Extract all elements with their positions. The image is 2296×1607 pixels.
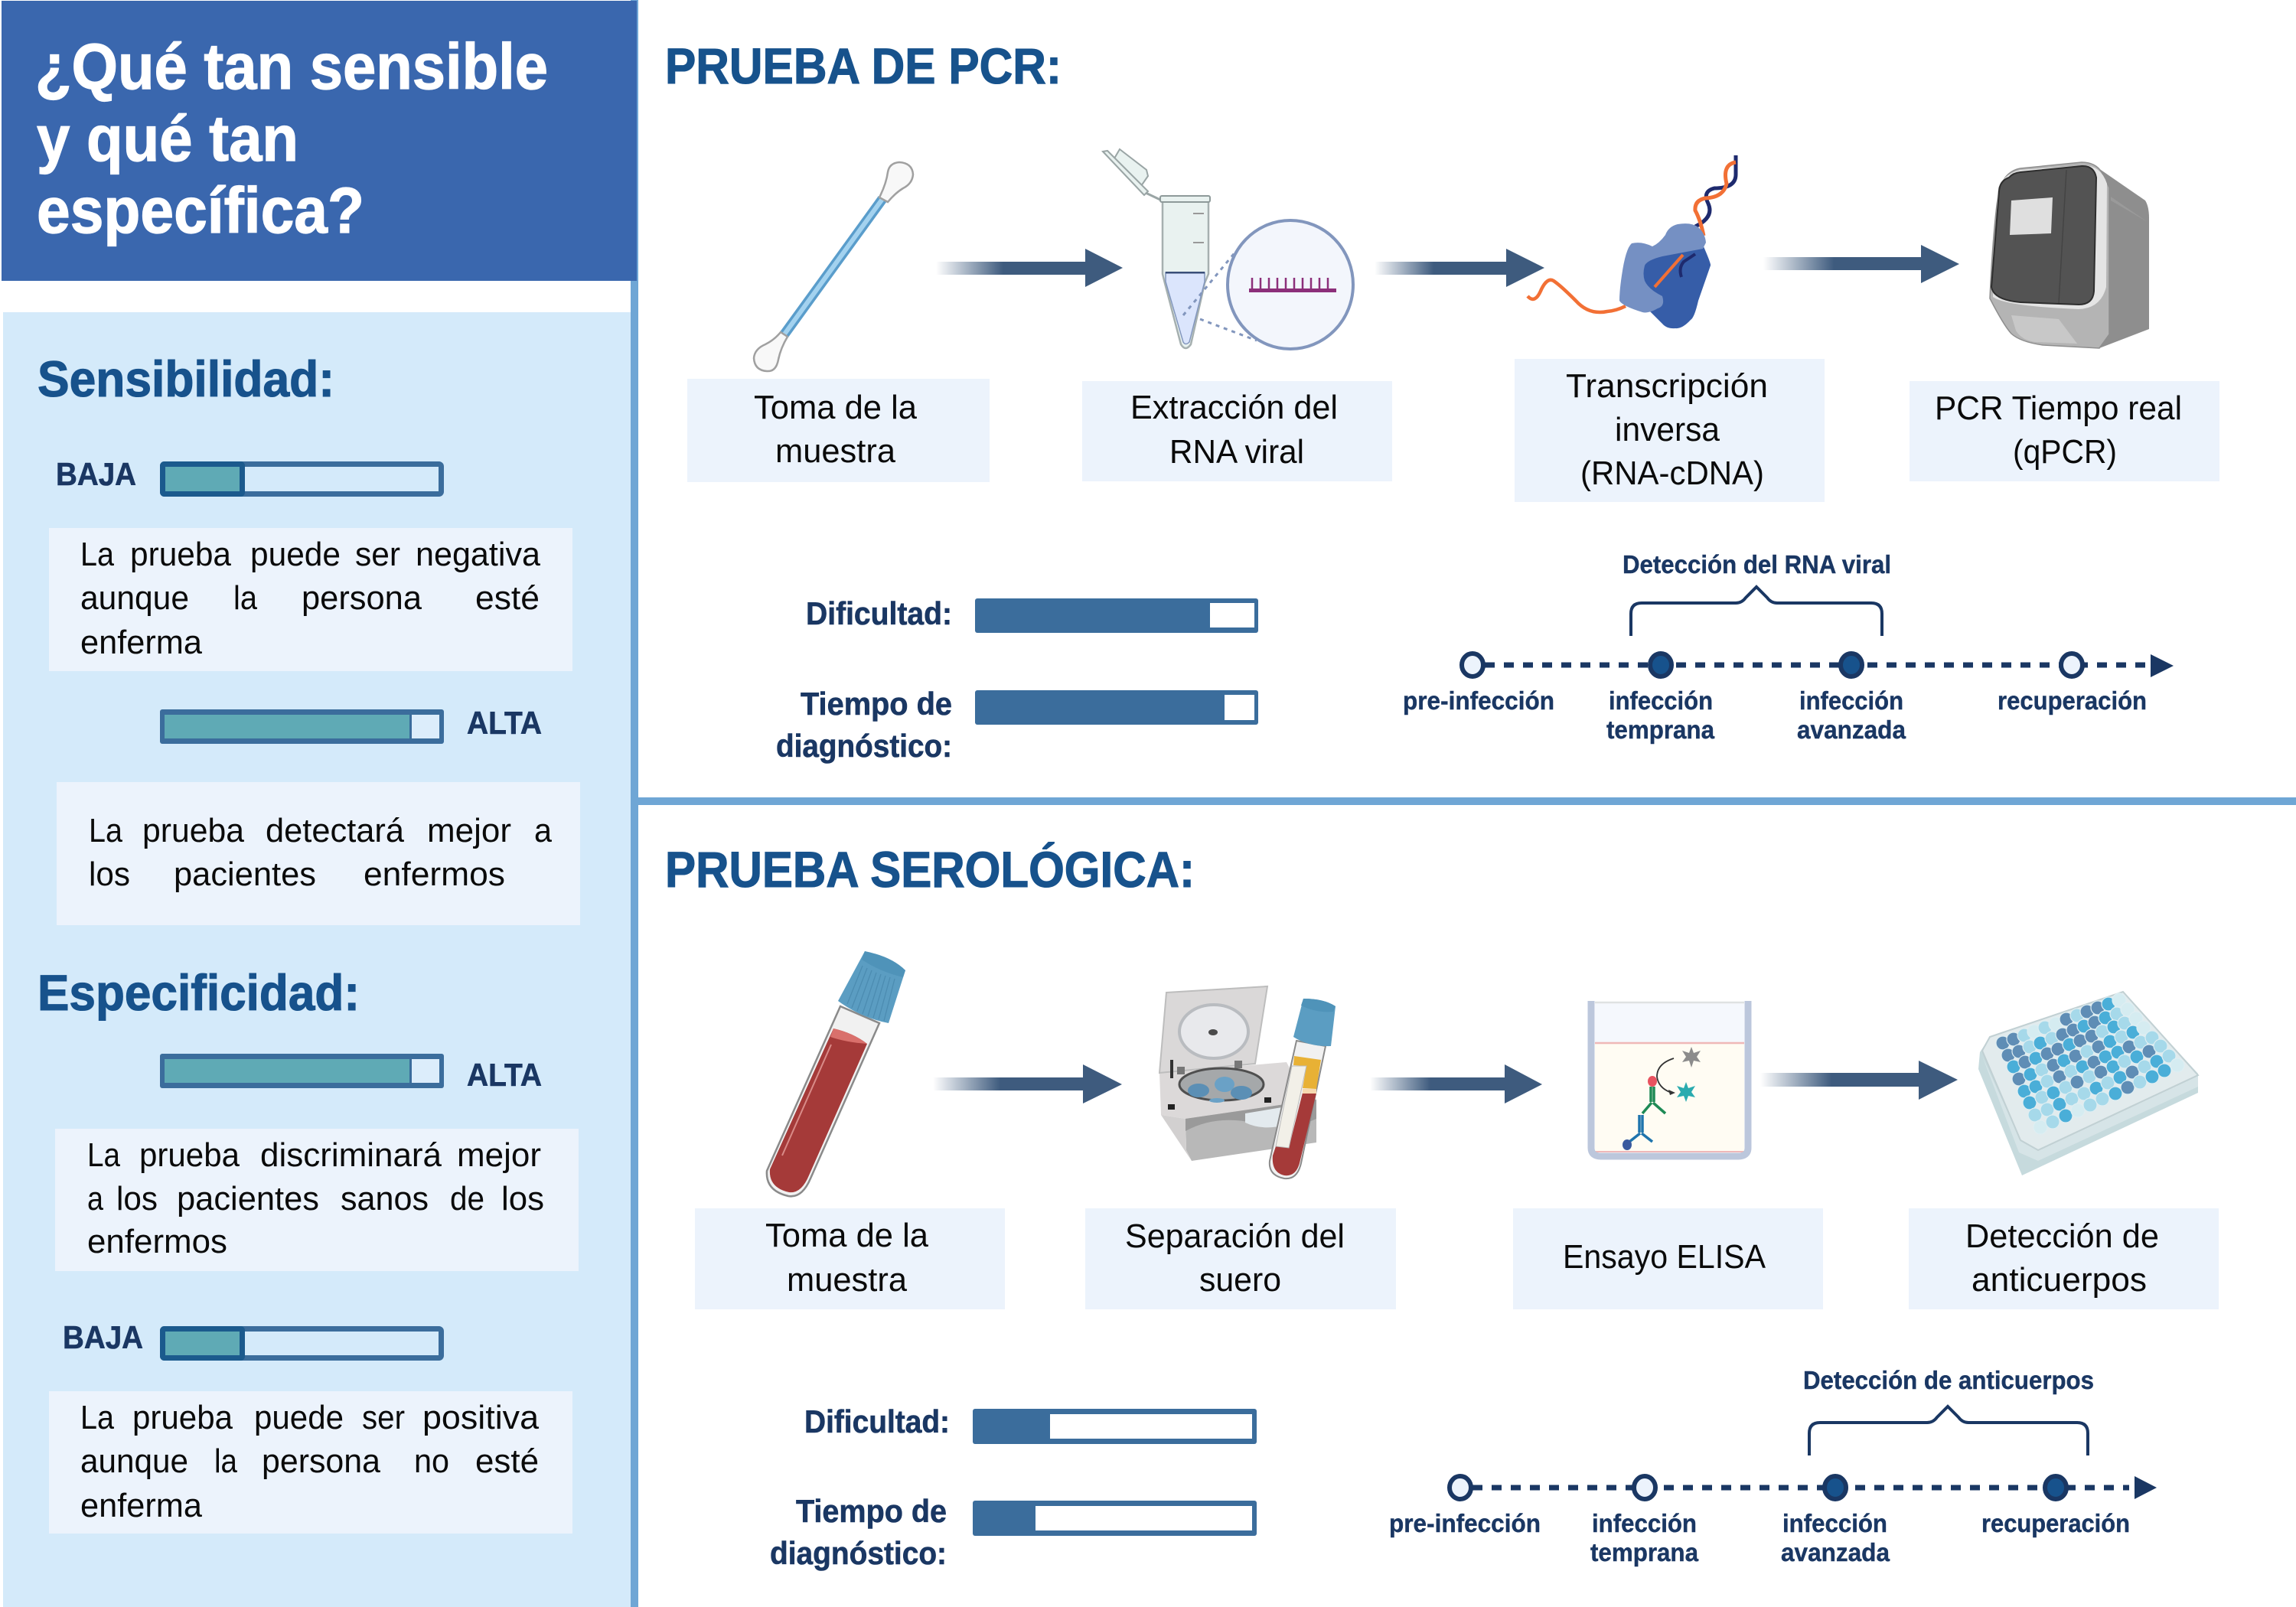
text box: detectará: a <box>534 812 552 849</box>
text box: extracción: RNA viral <box>1169 433 1304 471</box>
bar: tiempo PCR <box>975 690 1258 725</box>
icon: blood tube <box>767 951 905 1196</box>
text box: positiva: persona <box>262 1442 381 1480</box>
icon: swab <box>754 162 913 371</box>
icon: reverse transcriptase <box>1528 155 1736 328</box>
heading: sensibilidad: Sensibilidad: <box>38 350 334 407</box>
text box: ensayo ELISA: Ensayo ELISA <box>1563 1238 1766 1276</box>
arrow <box>936 249 1123 287</box>
label: infección avanzada: infección <box>1799 686 1903 715</box>
text box: detectará: enfermos <box>364 856 505 893</box>
label: infección temprana: infección <box>1609 686 1713 715</box>
arrow <box>1375 249 1544 287</box>
title: ¿Qué tan sensible <box>35 31 548 103</box>
label: tiempo de diagnóstico: diagnóstico: <box>770 1535 947 1571</box>
text box: detectará <box>57 782 580 925</box>
node: infección avanzada <box>1841 654 1862 676</box>
label: baja: BAJA <box>63 1319 143 1355</box>
bar: dificultad serológica <box>973 1409 1257 1444</box>
text box: detectará: prueba <box>142 812 245 849</box>
brace <box>1631 587 1882 636</box>
text box: toma de la muestra: muestra <box>787 1261 908 1299</box>
panel: especificidad <box>38 964 579 1534</box>
label: detección del RNA viral: Detección del RNA viral <box>1623 550 1891 579</box>
heading: prueba serológica: PRUEBA SEROLÓGICA: <box>665 841 1195 898</box>
label: infección avanzada: avanzada <box>1797 715 1906 744</box>
label: tiempo de diagnóstico: Tiempo de <box>796 1493 947 1529</box>
text box: discriminará: discriminará <box>260 1136 442 1174</box>
node: recuperación <box>2045 1476 2066 1499</box>
panel: prueba serológica <box>665 841 2219 1571</box>
text box: detectará: los <box>89 856 130 893</box>
text box: positiva: aunque <box>80 1442 188 1480</box>
arrow <box>1763 245 1959 283</box>
text box: PCR tiempo real <box>1910 381 2219 481</box>
label: baja: BAJA <box>56 456 136 492</box>
text box: discriminará: prueba <box>139 1136 240 1174</box>
label: tiempo de diagnóstico: diagnóstico: <box>776 728 952 764</box>
timeline: PCR <box>1403 550 2174 744</box>
label: infección avanzada: avanzada <box>1781 1538 1890 1566</box>
label: infección temprana: temprana <box>1606 715 1715 744</box>
text box: detección de anticuerpos <box>1909 1208 2219 1309</box>
label: dificultad: Dificultad: <box>806 595 952 631</box>
text box: discriminará: pacientes <box>177 1180 319 1217</box>
text box: PCR tiempo real: PCR Tiempo real <box>1935 390 2182 427</box>
text box: extracción <box>1082 381 1392 481</box>
heading: prueba de PCR: PRUEBA DE PCR: <box>665 37 1062 94</box>
label: pre-infección: pre-infección <box>1403 686 1554 715</box>
text box: negativa: prueba <box>130 536 232 573</box>
text box: discriminará: los <box>116 1180 158 1217</box>
text box: transcripción inversa: inversa <box>1615 411 1720 448</box>
node: recuperación <box>2061 654 2082 676</box>
label: pre-infección: pre-infección <box>1389 1509 1541 1537</box>
bar: sensibilidad baja <box>162 464 441 494</box>
panel: title block <box>2 1 637 281</box>
text box: negativa: la <box>233 579 257 617</box>
arrow <box>1760 1061 1958 1100</box>
text box: positiva: no <box>414 1442 449 1480</box>
icon: centrifuge with tube <box>1159 986 1336 1178</box>
text box: detección de anticuerpos: Detección de <box>1965 1217 2159 1255</box>
title: y qué tan <box>37 103 298 174</box>
text box: negativa: enferma <box>80 624 203 661</box>
text box: discriminará: sanos <box>341 1180 429 1217</box>
text box: positiva: la <box>214 1442 237 1480</box>
text box: transcripción inversa <box>1515 359 1825 502</box>
text box: negativa: puede <box>250 536 341 573</box>
text box: toma de la muestra: Toma de la <box>754 389 918 426</box>
icon: well plate <box>1978 992 2198 1175</box>
bar: dificultad PCR <box>975 598 1258 633</box>
node: pre-infección <box>1462 654 1483 676</box>
text box: ensayo ELISA <box>1513 1208 1823 1309</box>
icon: qPCR machine <box>1990 162 2149 348</box>
text box: positiva: La <box>80 1399 114 1436</box>
text box: discriminará: de <box>450 1180 484 1217</box>
label: alta: ALTA <box>467 705 542 741</box>
label: tiempo de diagnóstico: Tiempo de <box>801 686 952 722</box>
text box: transcripción inversa: Transcripción <box>1566 367 1768 405</box>
label: infección temprana: temprana <box>1590 1538 1699 1566</box>
text box: detección de anticuerpos: anticuerpos <box>1971 1261 2147 1299</box>
icon: tube with RNA <box>1103 149 1353 349</box>
text box: negativa: aunque <box>80 579 189 617</box>
node: infección avanzada <box>1825 1476 1846 1499</box>
label: recuperación: recuperación <box>1981 1509 2130 1537</box>
text box: separación del suero: suero <box>1199 1261 1281 1299</box>
text box: toma de la muestra <box>695 1208 1005 1309</box>
bar: tiempo serológica <box>973 1501 1257 1536</box>
icon: ELISA well <box>1591 1001 1748 1156</box>
label: alta: ALTA <box>467 1057 542 1093</box>
brace <box>1809 1407 2088 1455</box>
title: específica? <box>37 174 364 246</box>
arrow <box>1370 1064 1542 1103</box>
text box: transcripción inversa: (RNA-cDNA) <box>1580 455 1764 492</box>
text box: positiva: puede <box>254 1399 344 1436</box>
text box: detectará: La <box>89 812 122 849</box>
bar: sensibilidad alta <box>160 709 444 744</box>
text box: separación del suero <box>1085 1208 1396 1309</box>
text box: positiva: prueba <box>132 1399 233 1436</box>
text box: separación del suero: Separación del <box>1125 1217 1345 1255</box>
text box: discriminará <box>55 1129 579 1271</box>
text box: extracción: Extracción del <box>1130 389 1338 426</box>
text box: negativa: ser <box>355 536 400 573</box>
text box: discriminará: los <box>501 1180 544 1217</box>
text box: toma de la muestra: Toma de la <box>765 1217 929 1254</box>
label: recuperación: recuperación <box>1998 686 2147 715</box>
text box: negativa: persona <box>302 579 422 617</box>
text box: detectará: detectará <box>266 812 405 849</box>
text box: detectará: pacientes <box>174 856 316 893</box>
arrowhead <box>2151 654 2174 677</box>
text box: toma de la muestra: muestra <box>775 432 896 470</box>
text box: toma de la muestra <box>687 379 990 482</box>
text box: negativa: La <box>80 536 114 573</box>
text box: discriminará: enfermos <box>87 1223 227 1260</box>
label: infección avanzada: infección <box>1782 1509 1887 1537</box>
text box: discriminará: mejor <box>457 1136 541 1174</box>
label: detección de anticuerpos: Detección de anticuerpos <box>1803 1366 2094 1394</box>
text box: negativa: esté <box>475 579 540 617</box>
dashed axis <box>1485 663 2145 667</box>
panel: sensibilidad <box>38 350 580 925</box>
text box: positiva: enferma <box>80 1487 203 1524</box>
text box: positiva <box>49 1391 572 1534</box>
arrowhead <box>2135 1476 2157 1499</box>
text box: positiva: esté <box>475 1442 539 1480</box>
node: infección temprana <box>1650 654 1671 676</box>
vertical divider <box>631 0 638 1607</box>
text box: positiva: positiva <box>422 1399 540 1436</box>
text box: negativa <box>49 528 572 671</box>
bar: especificidad baja <box>162 1328 441 1358</box>
label: infección temprana: infección <box>1592 1509 1697 1537</box>
panel: sidebar background <box>3 312 631 1607</box>
panel: prueba de PCR <box>665 37 2219 764</box>
dashed axis <box>1473 1485 2129 1491</box>
text box: discriminará: a <box>87 1180 103 1217</box>
bar: especificidad alta <box>160 1054 444 1088</box>
node: pre-infección <box>1450 1476 1471 1499</box>
text box: positiva: ser <box>362 1399 405 1436</box>
text box: PCR tiempo real: (qPCR) <box>2013 433 2117 471</box>
horizontal divider <box>638 797 2296 805</box>
label: dificultad: Dificultad: <box>804 1403 950 1439</box>
text box: discriminará: La <box>87 1136 120 1174</box>
timeline: serológica <box>1389 1366 2157 1566</box>
heading: especificidad: Especificidad: <box>38 964 360 1021</box>
node: infección temprana <box>1634 1476 1655 1499</box>
text box: negativa: negativa <box>416 536 541 573</box>
arrow <box>933 1064 1122 1103</box>
text box: detectará: mejor <box>427 812 511 849</box>
